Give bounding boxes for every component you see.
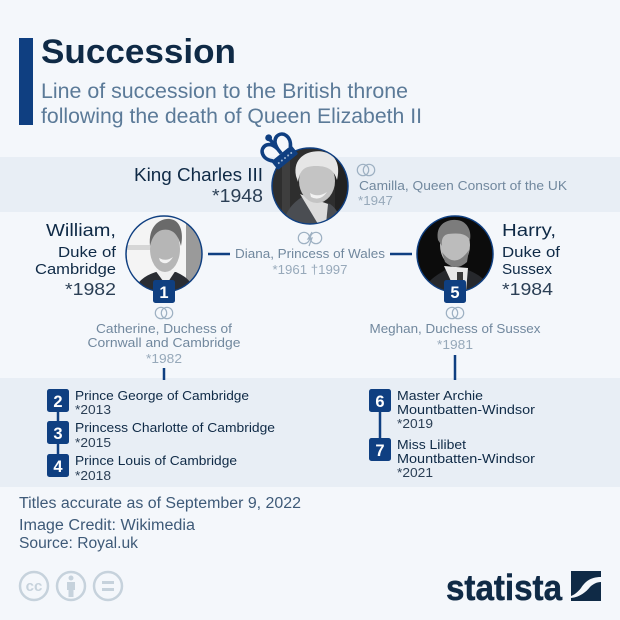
William name: Duke of xyxy=(58,245,117,261)
names: Mountbatten-Windsor xyxy=(397,403,535,417)
portrait: William xyxy=(126,216,202,292)
names: *2019 xyxy=(397,417,433,431)
portrait: King Charles III xyxy=(272,148,348,225)
rank badge 4: 4 xyxy=(53,458,63,476)
portrait: Harry xyxy=(417,216,493,292)
Diana text xyxy=(235,247,385,277)
names: Princess Charlotte of Cambridge xyxy=(75,421,275,435)
names: *2013 xyxy=(75,403,111,417)
rank badge 7: 7 xyxy=(375,442,385,460)
names: *2015 xyxy=(75,436,111,450)
rank badge 7 xyxy=(369,438,391,461)
Camilla text: Camilla, Queen Consort of the UK xyxy=(359,179,568,193)
portrait ring: King Charles III xyxy=(272,148,348,224)
King Charles III name: King Charles III xyxy=(134,165,263,185)
subtitle xyxy=(41,80,422,128)
icon: divorced rings Diana xyxy=(298,232,322,246)
subtitle: following the death of Queen Elizabeth II xyxy=(41,105,422,128)
names: *2021 xyxy=(397,466,433,480)
rank badge 5: 5 xyxy=(450,284,460,302)
portrait ring: Harry xyxy=(417,216,493,292)
title: Succession xyxy=(41,33,236,71)
icon: wedding rings Catherine xyxy=(155,307,173,319)
rank badge 3: 3 xyxy=(53,425,63,443)
rank badge 6: 6 xyxy=(375,393,385,411)
children of William xyxy=(47,389,275,483)
connector lines xyxy=(58,254,455,470)
Catherine text xyxy=(88,322,241,366)
William name: William, xyxy=(46,220,116,240)
Harry name: Harry, xyxy=(502,220,556,240)
rank badge 4 xyxy=(47,454,69,477)
icon: wedding rings Meghan xyxy=(446,307,464,319)
rank badge 3 xyxy=(47,421,69,444)
Diana text: *1961 †1997 xyxy=(272,263,348,277)
notes and source: Source: Royal.uk xyxy=(19,535,138,552)
names: *2018 xyxy=(75,469,111,483)
rank badge 6 xyxy=(369,389,391,412)
icon: cc licence xyxy=(20,572,122,600)
names: Master Archie xyxy=(397,389,483,403)
names: Mountbatten-Windsor xyxy=(397,452,535,466)
King Charles III name: *1948 xyxy=(212,186,263,206)
Harry name xyxy=(502,220,561,299)
Catherine text: Cornwall and Cambridge xyxy=(88,336,241,350)
Meghan text: Meghan, Duchess of Sussex xyxy=(370,322,541,336)
names xyxy=(397,389,535,480)
rank badge 1 xyxy=(153,280,175,303)
notes and source: Image Credit: Wikimedia xyxy=(19,517,195,534)
rank badge 2: 2 xyxy=(53,393,63,411)
names: Miss Lilibet xyxy=(397,438,467,452)
Meghan text: *1981 xyxy=(437,338,473,352)
Camilla text: *1947 xyxy=(358,194,393,208)
portrait ring: William xyxy=(126,216,202,292)
logo: statista: statista xyxy=(446,567,563,608)
Diana text: Diana, Princess of Wales xyxy=(235,247,385,261)
Camilla text xyxy=(358,179,568,208)
children of Harry xyxy=(369,389,535,480)
King Charles III name xyxy=(134,165,263,206)
title accent bar xyxy=(19,38,33,125)
icon: cc licence: cc xyxy=(26,578,42,595)
William name: *1982 xyxy=(65,279,116,299)
rank badge 1: 1 xyxy=(159,284,169,302)
icon: wedding rings Camilla xyxy=(357,164,375,176)
Harry name: Duke of xyxy=(502,245,561,261)
rank badge 2 xyxy=(47,389,69,412)
notes and source xyxy=(19,495,301,552)
icon: crown xyxy=(255,125,300,172)
William name xyxy=(35,220,117,299)
Catherine text: *1982 xyxy=(146,352,182,366)
subtitle: Line of succession to the British throne xyxy=(41,80,408,103)
Meghan text xyxy=(370,322,541,352)
Catherine text: Catherine, Duchess of xyxy=(96,322,233,336)
William name: Cambridge xyxy=(35,262,116,278)
names xyxy=(75,389,275,483)
Harry name: *1984 xyxy=(502,279,553,299)
rank badge 5 xyxy=(444,280,466,303)
notes and source: Titles accurate as of September 9, 2022 xyxy=(19,495,301,512)
Harry name: Sussex xyxy=(502,262,553,278)
names: Prince George of Cambridge xyxy=(75,389,249,403)
names: Prince Louis of Cambridge xyxy=(75,454,237,468)
